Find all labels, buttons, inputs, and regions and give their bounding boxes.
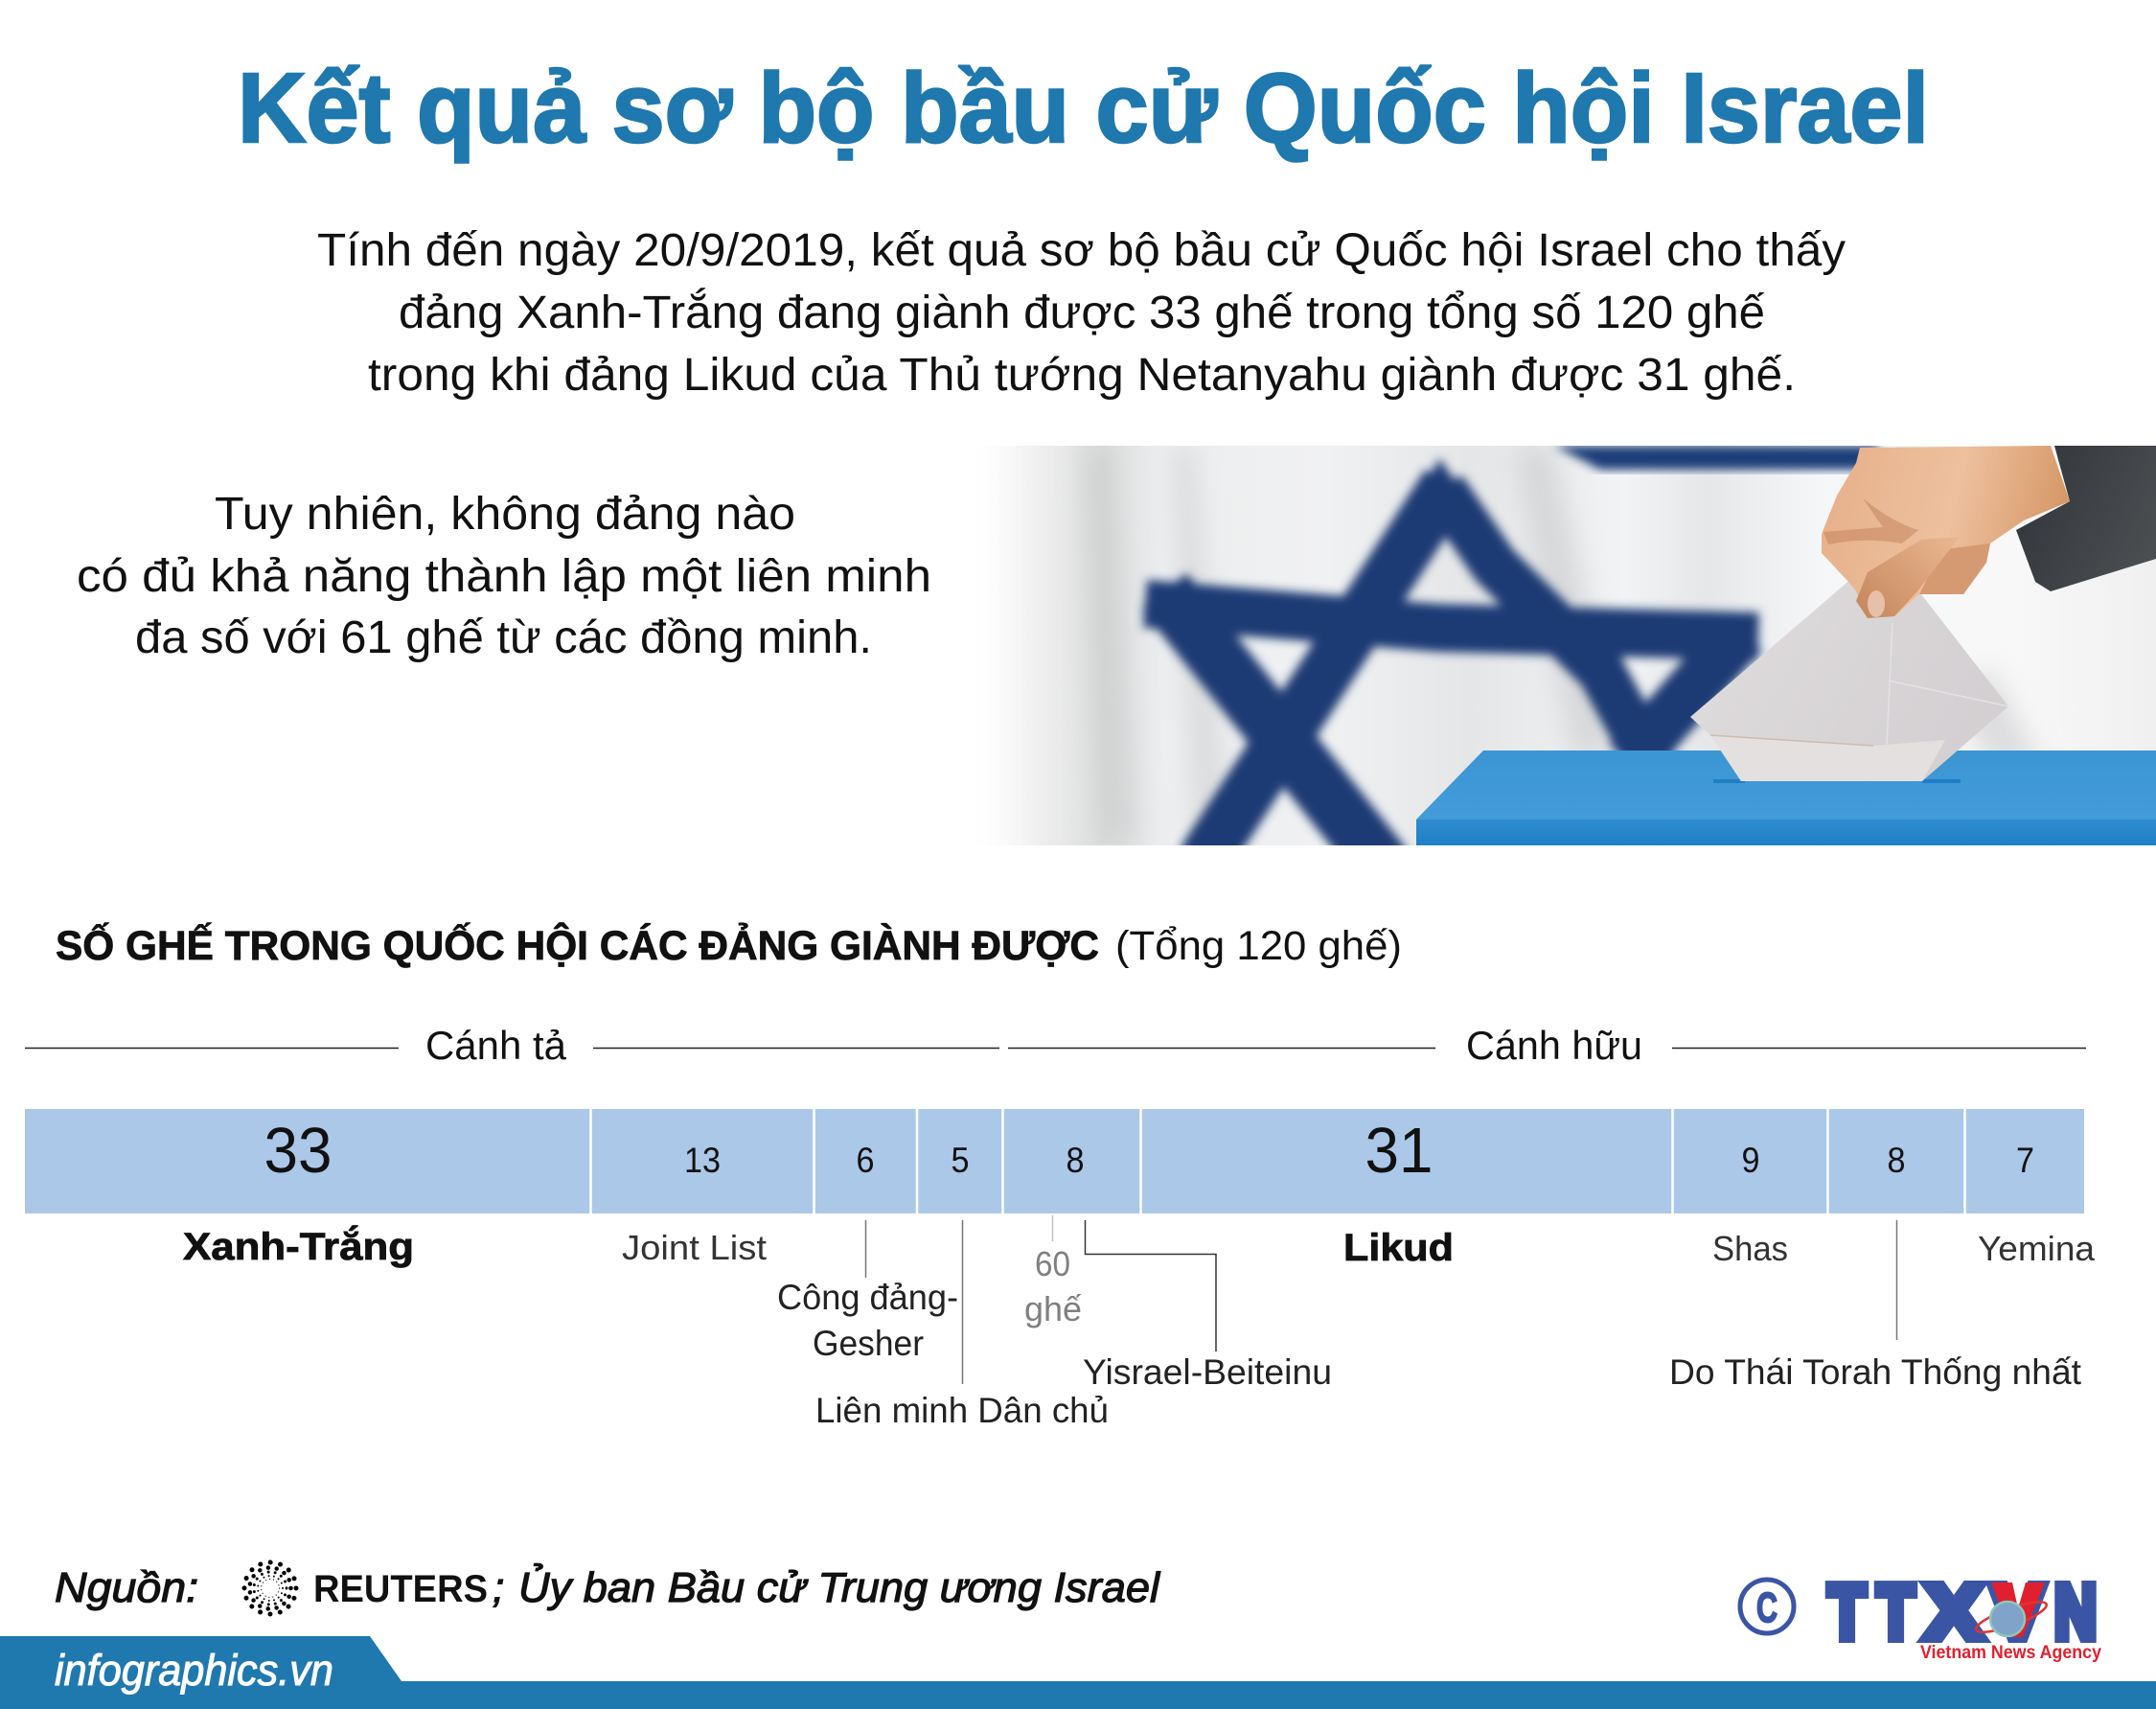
party labels: Liên minh Dân chủ — [815, 1391, 1109, 1430]
source line: ; — [493, 1564, 504, 1611]
logo: TTXVN Vietnam News Agency: X — [1925, 1569, 1983, 1654]
wing header: left wing: Cánh tả — [425, 1023, 567, 1068]
logo: TTXVN Vietnam News Agency: T — [1877, 1569, 1915, 1654]
wing header: right wing: Cánh hữu — [1466, 1023, 1642, 1068]
logo: TTXVN Vietnam News Agency — [1828, 1569, 2101, 1663]
side paragraph — [77, 489, 931, 663]
footer band — [0, 1636, 2156, 1709]
sleeve — [2016, 446, 2156, 591]
party labels: Do Thái Torah Thống nhất — [1669, 1352, 2082, 1392]
majority marker: 60 seats: ghế — [1024, 1289, 1082, 1328]
majority marker: 60 seats: 60 — [1035, 1244, 1070, 1283]
side paragraph: có đủ khả năng thành lập một liên minh — [77, 551, 931, 602]
party labels — [183, 1224, 2096, 1430]
party labels: Yisrael-Beiteinu — [1083, 1352, 1332, 1392]
envelope — [1690, 578, 2008, 781]
hand — [1822, 446, 2070, 618]
intro paragraph: đảng Xanh-Trắng đang giành được 33 ghế trong tổng số 120 ghế — [399, 287, 1765, 338]
seat bar chart: 13 — [684, 1141, 721, 1180]
source line: REUTERS — [313, 1568, 488, 1610]
majority marker: 60 seats — [1024, 1215, 1082, 1328]
side paragraph: đa số với 61 ghế từ các đồng minh. — [135, 612, 872, 663]
source line — [55, 1562, 1160, 1614]
party labels: Joint List — [622, 1228, 767, 1267]
curled fingers — [1919, 543, 1990, 594]
flag top stripe — [1554, 446, 1878, 470]
logo: TTXVN Vietnam News Agency: V — [1991, 1569, 2044, 1654]
party labels: Yemina — [1978, 1229, 2096, 1268]
logo: TTXVN Vietnam News Agency: Vietnam News Agency — [1920, 1643, 2101, 1663]
side paragraph: Tuy nhiên, không đảng nào — [215, 489, 795, 540]
leader lines — [866, 1220, 1897, 1384]
logo: TTXVN Vietnam News Agency: N — [2054, 1569, 2097, 1654]
source line: Ủy ban Bầu cử Trung ương Israel — [518, 1562, 1160, 1611]
seat bar chart: 33 — [264, 1115, 332, 1187]
icon: Reuters dotted logo — [244, 1562, 296, 1614]
intro paragraph: Tính đến ngày 20/9/2019, kết quả sơ bộ bầu cử Quốc hội Israel cho thấy — [317, 225, 1846, 276]
website label: infographics.vn — [55, 1646, 333, 1695]
seat bar chart — [25, 1109, 2084, 1213]
seat bar chart: 8 — [1066, 1141, 1085, 1180]
seat bar chart: 9 — [1742, 1141, 1759, 1180]
chart heading: SỐ GHẾ TRONG QUỐC HỘI CÁC ĐẢNG GIÀNH ĐƯỢC — [56, 922, 1099, 969]
party labels: Shas — [1712, 1229, 1788, 1268]
star of David — [1145, 458, 1758, 867]
chart heading: (Tổng 120 ghế) — [1115, 923, 1402, 969]
icon: copyright mark — [1740, 1580, 1794, 1633]
party labels: Likud — [1343, 1227, 1454, 1269]
intro paragraph — [317, 225, 1846, 401]
photo: hand casting ballot in front of Israeli flag — [974, 446, 2156, 867]
seat bar chart: 8 — [1888, 1141, 1905, 1180]
thumb — [1856, 537, 1960, 618]
logo: TTXVN Vietnam News Agency: T — [1828, 1569, 1866, 1654]
title: Kết quả sơ bộ bầu cử Quốc hội Israel — [238, 53, 1929, 163]
source line: Nguồn: — [55, 1564, 198, 1611]
ballot box — [1416, 751, 2156, 845]
party labels: Công đảng- — [777, 1278, 958, 1317]
seat bar chart: 7 — [2016, 1141, 2034, 1180]
seat bar chart: 6 — [857, 1141, 874, 1180]
icon: copyright mark: C — [1756, 1584, 1778, 1631]
intro paragraph: trong khi đảng Likud của Thủ tướng Netanyahu giành được 31 ghế. — [368, 350, 1796, 401]
seat bar chart: 31 — [1365, 1115, 1434, 1187]
party labels: Xanh-Trắng — [183, 1224, 414, 1268]
seat bar chart: 5 — [951, 1141, 970, 1180]
party labels: Gesher — [813, 1324, 924, 1363]
